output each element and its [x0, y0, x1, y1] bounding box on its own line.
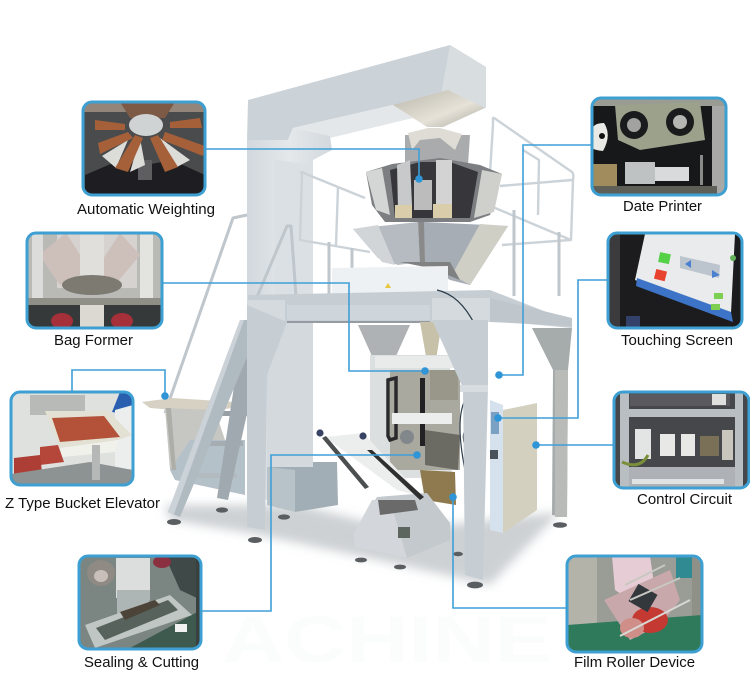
watermark: ACHINE	[222, 602, 552, 676]
floor shadow	[165, 505, 560, 585]
front platform	[248, 290, 572, 328]
label: automatic weighting: Automatic Weighting	[77, 202, 215, 218]
panel: touching screen	[608, 233, 742, 328]
label: bag former: Bag Former	[54, 333, 133, 349]
label: film roller device: Film Roller Device	[574, 655, 695, 671]
vertical form fill seal unit	[370, 355, 460, 505]
bucket elevator	[142, 398, 245, 495]
leader line: control circuit	[532, 441, 614, 449]
rails	[165, 118, 573, 413]
panel: bag former	[27, 233, 162, 329]
touch panel	[437, 290, 481, 473]
leader line: automatic weighting	[205, 149, 423, 183]
hopper under gantry	[393, 90, 485, 127]
panel: date printer	[592, 98, 726, 195]
chute	[316, 429, 450, 558]
leader line: z type bucket elevator	[72, 370, 169, 400]
label: touching screen: Touching Screen	[621, 333, 733, 349]
leader line: touching screen	[494, 280, 608, 422]
control cabinet	[490, 400, 537, 533]
label: sealing and cutting: Sealing & Cutting	[84, 655, 199, 671]
label: control circuit: Control Circuit	[637, 492, 732, 508]
multihead weigher	[353, 128, 508, 285]
VFFS feed cones	[358, 325, 410, 365]
machine illustration	[142, 45, 573, 588]
warning sign	[385, 283, 391, 288]
panel: z type bucket elevator	[11, 392, 133, 485]
leader line: film roller device	[449, 493, 567, 608]
panel: film roller device	[567, 556, 702, 652]
discharge box	[332, 266, 448, 296]
legs	[247, 305, 572, 580]
leader line: bag former	[162, 283, 429, 375]
panel: sealing and cutting	[79, 556, 201, 649]
leader line: sealing and cutting	[201, 451, 421, 611]
rear cabinet and hopper box	[267, 322, 338, 512]
panel: automatic weighting	[83, 102, 205, 195]
leader line: date printer	[495, 145, 592, 379]
gantry frame	[247, 45, 486, 500]
panel: control circuit	[614, 392, 749, 488]
label: z type bucket elevator: Z Type Bucket Elevator	[5, 496, 160, 512]
stairs	[168, 320, 252, 517]
label: date printer: Date Printer	[623, 199, 702, 215]
feet	[167, 507, 567, 588]
